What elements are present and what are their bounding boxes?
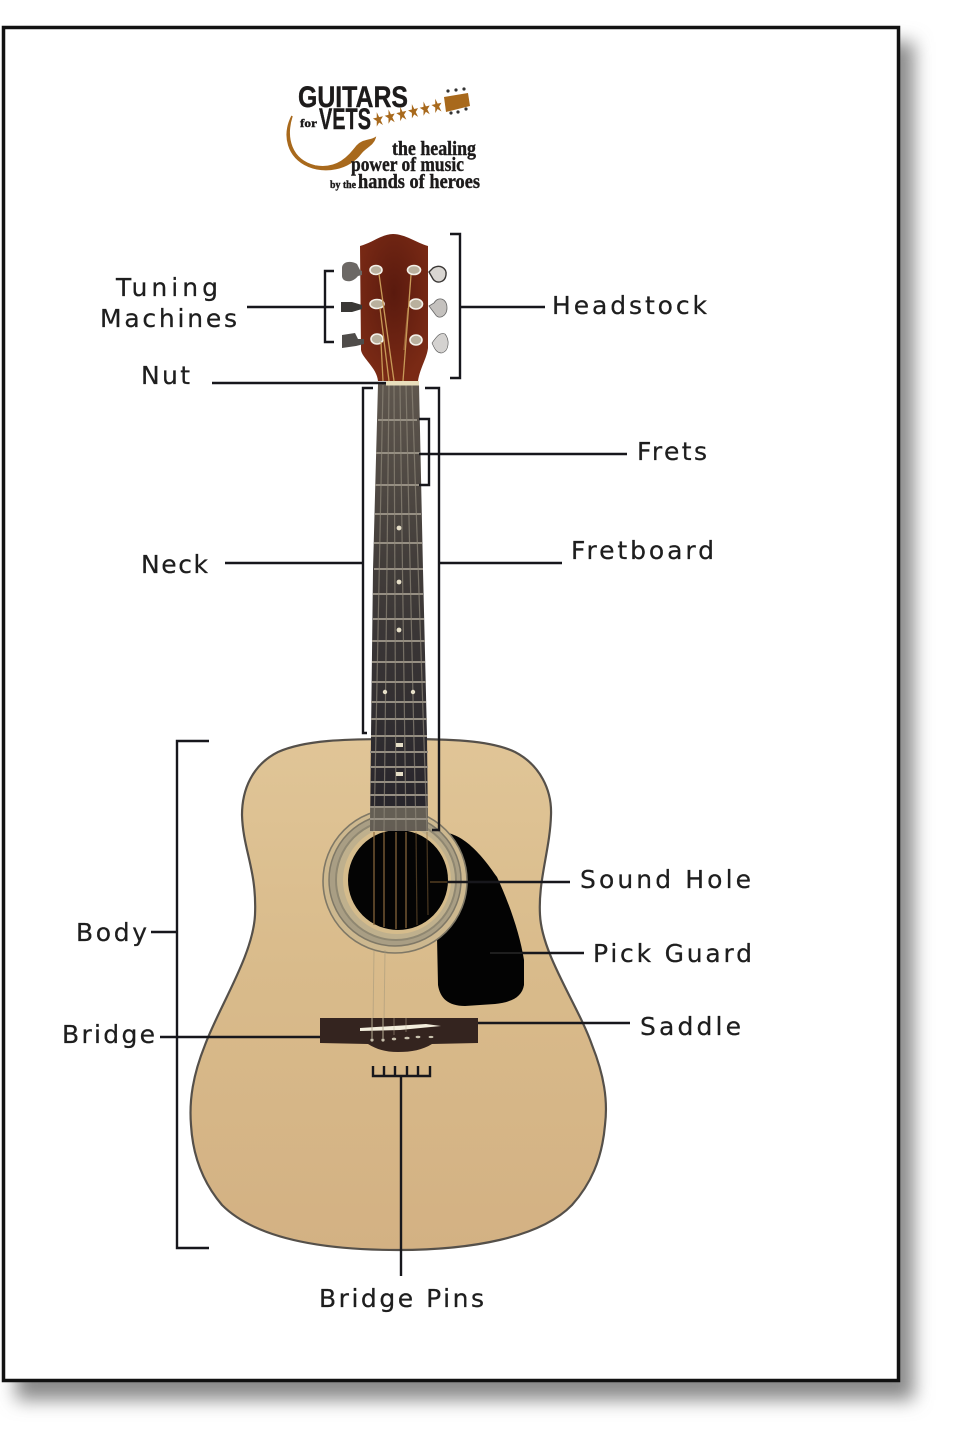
guitar illustration bbox=[191, 234, 606, 1250]
bridge with saddle and pins bbox=[320, 1018, 478, 1052]
callout: bridge pins: Bridge Pins bbox=[319, 1284, 484, 1313]
guitar body bbox=[191, 739, 606, 1250]
callout: tuning machines bbox=[100, 271, 334, 342]
tuning machine knobs bbox=[341, 262, 448, 353]
callout: bridge pins bbox=[319, 1066, 484, 1313]
neck and fretboard bbox=[370, 384, 428, 831]
tuning posts bbox=[370, 266, 422, 345]
pick guard bbox=[437, 832, 524, 1006]
callout: headstock: Headstock bbox=[552, 291, 708, 320]
callout: saddle: Saddle bbox=[640, 1012, 741, 1041]
callout: bridge: Bridge bbox=[62, 1020, 155, 1049]
logo: Guitars for Vets bbox=[287, 81, 480, 193]
callout: fretboard: Fretboard bbox=[571, 536, 714, 565]
logo: Guitars for Vets: GUITARS bbox=[298, 81, 408, 114]
headstock strings bbox=[379, 274, 411, 381]
callout: body: Body bbox=[76, 918, 147, 947]
callout: pick guard: Pick Guard bbox=[593, 939, 752, 968]
lower strings to bridge bbox=[373, 950, 385, 1025]
logo: Guitars for Vets: VETS bbox=[319, 103, 371, 136]
logo: Guitars for Vets: by the bbox=[330, 180, 357, 191]
callout: sound hole: Sound Hole bbox=[580, 865, 751, 894]
callout: body bbox=[76, 741, 209, 1248]
callout: tuning machines: Machines bbox=[100, 304, 237, 333]
callout: nut: Nut bbox=[141, 361, 190, 390]
logo: Guitars for Vets: for bbox=[300, 116, 318, 130]
callout: neck: Neck bbox=[141, 550, 209, 579]
callout: frets: Frets bbox=[637, 437, 707, 466]
logo: Guitars for Vets: ★★★★★★ bbox=[370, 94, 445, 132]
logo: Guitars for Vets: the healing bbox=[392, 138, 476, 160]
callout: tuning machines: Tuning bbox=[115, 273, 218, 302]
callout: fretboard bbox=[425, 388, 714, 830]
logo: Guitars for Vets: power of music bbox=[351, 154, 464, 176]
sound hole rosette bbox=[323, 809, 467, 953]
inner strings over sound hole bbox=[374, 832, 428, 929]
callout: headstock bbox=[450, 234, 708, 378]
callout: neck bbox=[141, 388, 373, 733]
callout: frets bbox=[419, 419, 707, 485]
logo: Guitars for Vets: hands of heroes bbox=[358, 171, 480, 193]
headstock bbox=[341, 234, 448, 386]
